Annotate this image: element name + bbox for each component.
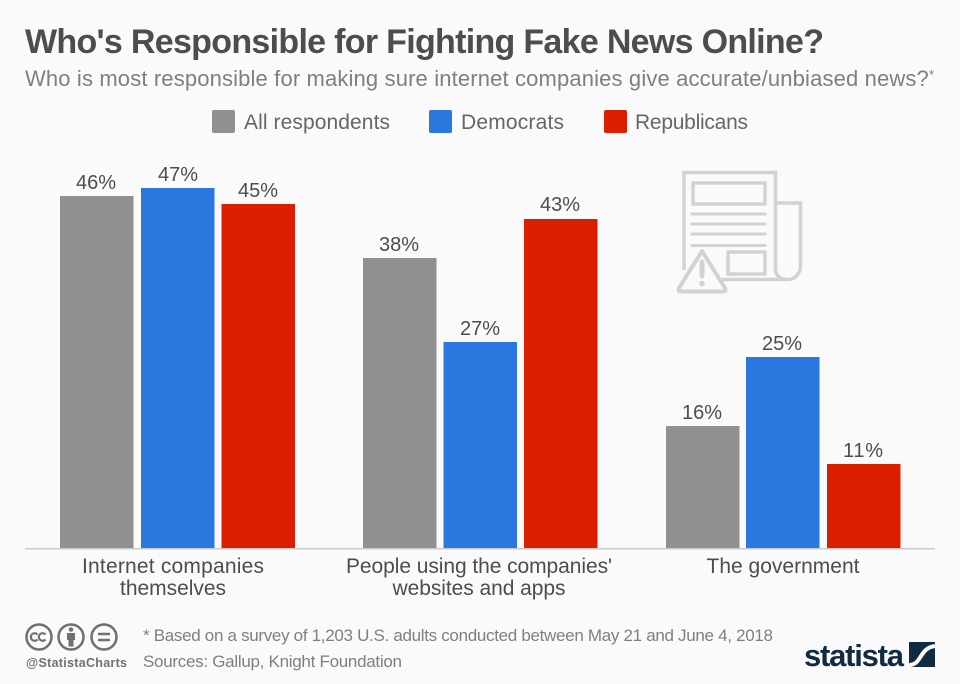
group: people using the companies' websites and apps: 27% — [460, 318, 500, 340]
group: the government — [666, 333, 900, 578]
group: people using the companies' websites and apps: People using the companies' — [346, 555, 612, 578]
group: internet companies themselves: 46% — [76, 172, 116, 194]
group: internet companies themselves: Internet companies — [82, 555, 264, 578]
group: people using the companies' websites and apps: websites and apps — [392, 577, 566, 600]
group: the government: 25% — [762, 333, 802, 355]
group: people using the companies' websites and apps: 38% — [379, 234, 419, 256]
icon: creative commons licence — [26, 624, 116, 650]
subtitle: * — [929, 67, 934, 82]
sources: Sources: Gallup, Knight Foundation — [143, 652, 402, 671]
legend: democrats: Democrats — [461, 111, 564, 134]
legend: all respondents: All respondents — [244, 111, 390, 134]
logo: statista: statista — [804, 638, 905, 673]
group: internet companies themselves: 45% — [238, 180, 278, 202]
legend: republicans: Republicans — [635, 111, 748, 134]
title: Who's Responsible for Fighting Fake News Online? — [25, 23, 824, 61]
group: the government: The government — [706, 555, 860, 578]
group: internet companies themselves — [60, 164, 295, 600]
icon: newspaper with warning sign — [679, 172, 800, 292]
group: internet companies themselves: 47% — [158, 164, 198, 186]
legend — [212, 110, 748, 134]
group: people using the companies' websites and apps — [346, 194, 612, 600]
handle: @StatistaCharts — [26, 656, 127, 670]
footnote: * Based on a survey of 1,203 U.S. adults conducted between May 21 and June 4, 2018 — [143, 626, 773, 645]
group: internet companies themselves: themselves — [120, 577, 226, 600]
logo mark — [909, 642, 935, 667]
group: the government: 11% — [843, 440, 883, 462]
group: the government: 16% — [682, 402, 722, 424]
group: people using the companies' websites and apps: 43% — [540, 194, 580, 216]
bar chart — [60, 164, 900, 600]
subtitle: Who is most responsible for making sure internet companies give accurate/unbiased news? — [25, 66, 929, 91]
